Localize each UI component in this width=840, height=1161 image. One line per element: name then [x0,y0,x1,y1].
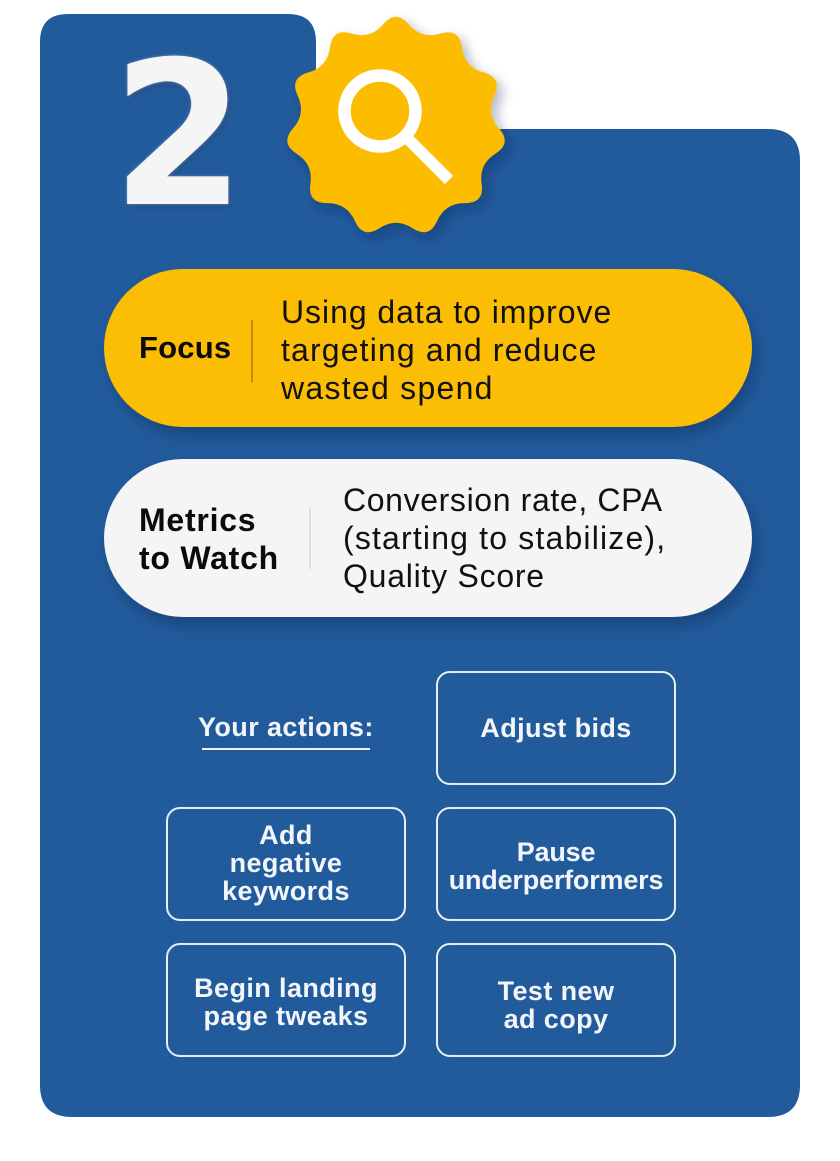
step number 2: 2 [112,18,245,252]
metrics divider and text: Conversion rate, CPA [343,482,663,518]
focus label: Focus [139,330,231,365]
metrics divider and text: (starting to stabilize), [343,520,666,556]
panel: focus [104,269,752,427]
focus divider and text [251,294,612,406]
action: test new ad copy: Test new [498,976,614,1006]
action: add negative keywords: keywords [222,876,350,906]
metrics divider and text: Quality Score [343,558,545,594]
action: begin landing page tweaks [166,943,406,1057]
action: pause underperformers: Pause [517,837,595,867]
action: test new ad copy: ad copy [504,1004,608,1034]
metrics divider and text [309,482,666,594]
focus divider and text: targeting and reduce [281,332,598,368]
metrics label: Metrics [139,502,256,538]
action: add negative keywords [166,807,406,921]
action: pause underperformers [436,807,676,921]
action: test new ad copy [436,943,676,1057]
focus divider and text: wasted spend [281,370,494,406]
action: adjust bids [436,671,676,785]
action: add negative keywords: negative [230,848,342,878]
heading: your actions: Your actions: [198,712,374,742]
metrics label [139,502,279,576]
metrics label: to Watch [139,540,279,576]
action: adjust bids: Adjust bids [480,713,632,743]
action: begin landing page tweaks: page tweaks [204,1001,368,1031]
icon: magnifier badge [287,16,512,240]
action: pause underperformers: underperformers [449,865,663,895]
panel: metrics to watch [104,459,752,617]
action: add negative keywords: Add [259,820,313,850]
focus divider and text: Using data to improve [281,294,612,330]
action: begin landing page tweaks: Begin landing [194,973,378,1003]
